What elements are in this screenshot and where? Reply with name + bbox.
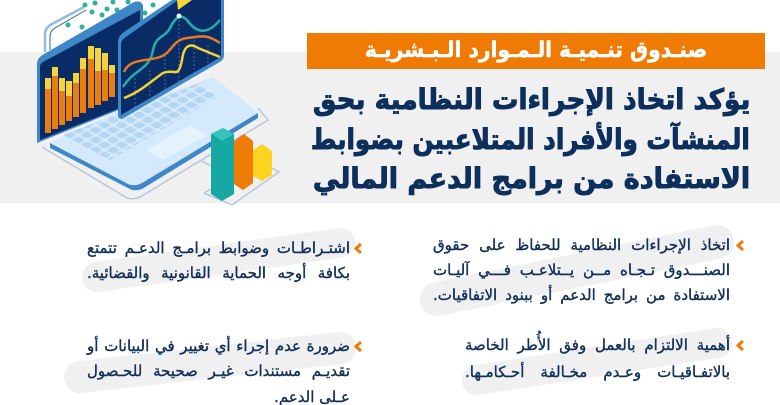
bullet: legal measures: اتخاذ الإجراءات النظامية للحفاظ على حقوق <box>433 236 730 254</box>
icon: chevron <box>354 341 362 352</box>
bullet: legal measures <box>433 236 744 304</box>
bullet: no data changes <box>86 336 362 405</box>
bullet: support program conditions: بكافة أوجه الحماية القانونية والقضائية. <box>87 264 350 282</box>
bullet: commitment: بالاتفـاقيـات وعـدم مخـالفة أحـكامـها. <box>465 363 730 381</box>
bullet: commitment <box>465 330 744 381</box>
headline: يؤكد اتخاذ الإجراءات النظامية بحق <box>313 83 750 116</box>
bullet: no data changes: تقديـم مستندات غيـر صحيحة للحـصول <box>87 362 350 380</box>
bullet: support program conditions <box>87 239 362 282</box>
orange title banner: صنـدوق تنـميـة الـمـوارد الـبـشريـة <box>365 38 707 63</box>
bullet: legal measures: الاستفادة من برامج الدعم أو ببنود الاتفاقيات. <box>433 286 730 304</box>
grey header band <box>0 52 780 203</box>
icon: chevron <box>354 243 362 254</box>
orange title banner <box>307 33 765 69</box>
headline <box>311 83 750 196</box>
bullet: no data changes: ضرورة عدم إجراء أي تغيير في البيانات أو <box>87 337 350 355</box>
headline: المنشآت والأفراد المتلاعبين بضوابط <box>311 123 750 156</box>
icon: laptop with charts <box>37 0 280 206</box>
bullet: support program conditions: اشتـراطـات وضوابط برامـج الدعـم تتمتع <box>87 239 350 257</box>
icon: chevron <box>736 240 744 251</box>
icon: chevron <box>736 340 744 351</box>
bullet: legal measures: الصنـــدوق تـجـاه مــن يــتلاعـب فـــي آليـات <box>433 261 730 279</box>
bullet: commitment: أهمية الالتزام بالعمل وفق الأُطر الخاصة <box>465 336 730 354</box>
headline: الاستفادة من برامج الدعم المالي <box>313 162 750 195</box>
